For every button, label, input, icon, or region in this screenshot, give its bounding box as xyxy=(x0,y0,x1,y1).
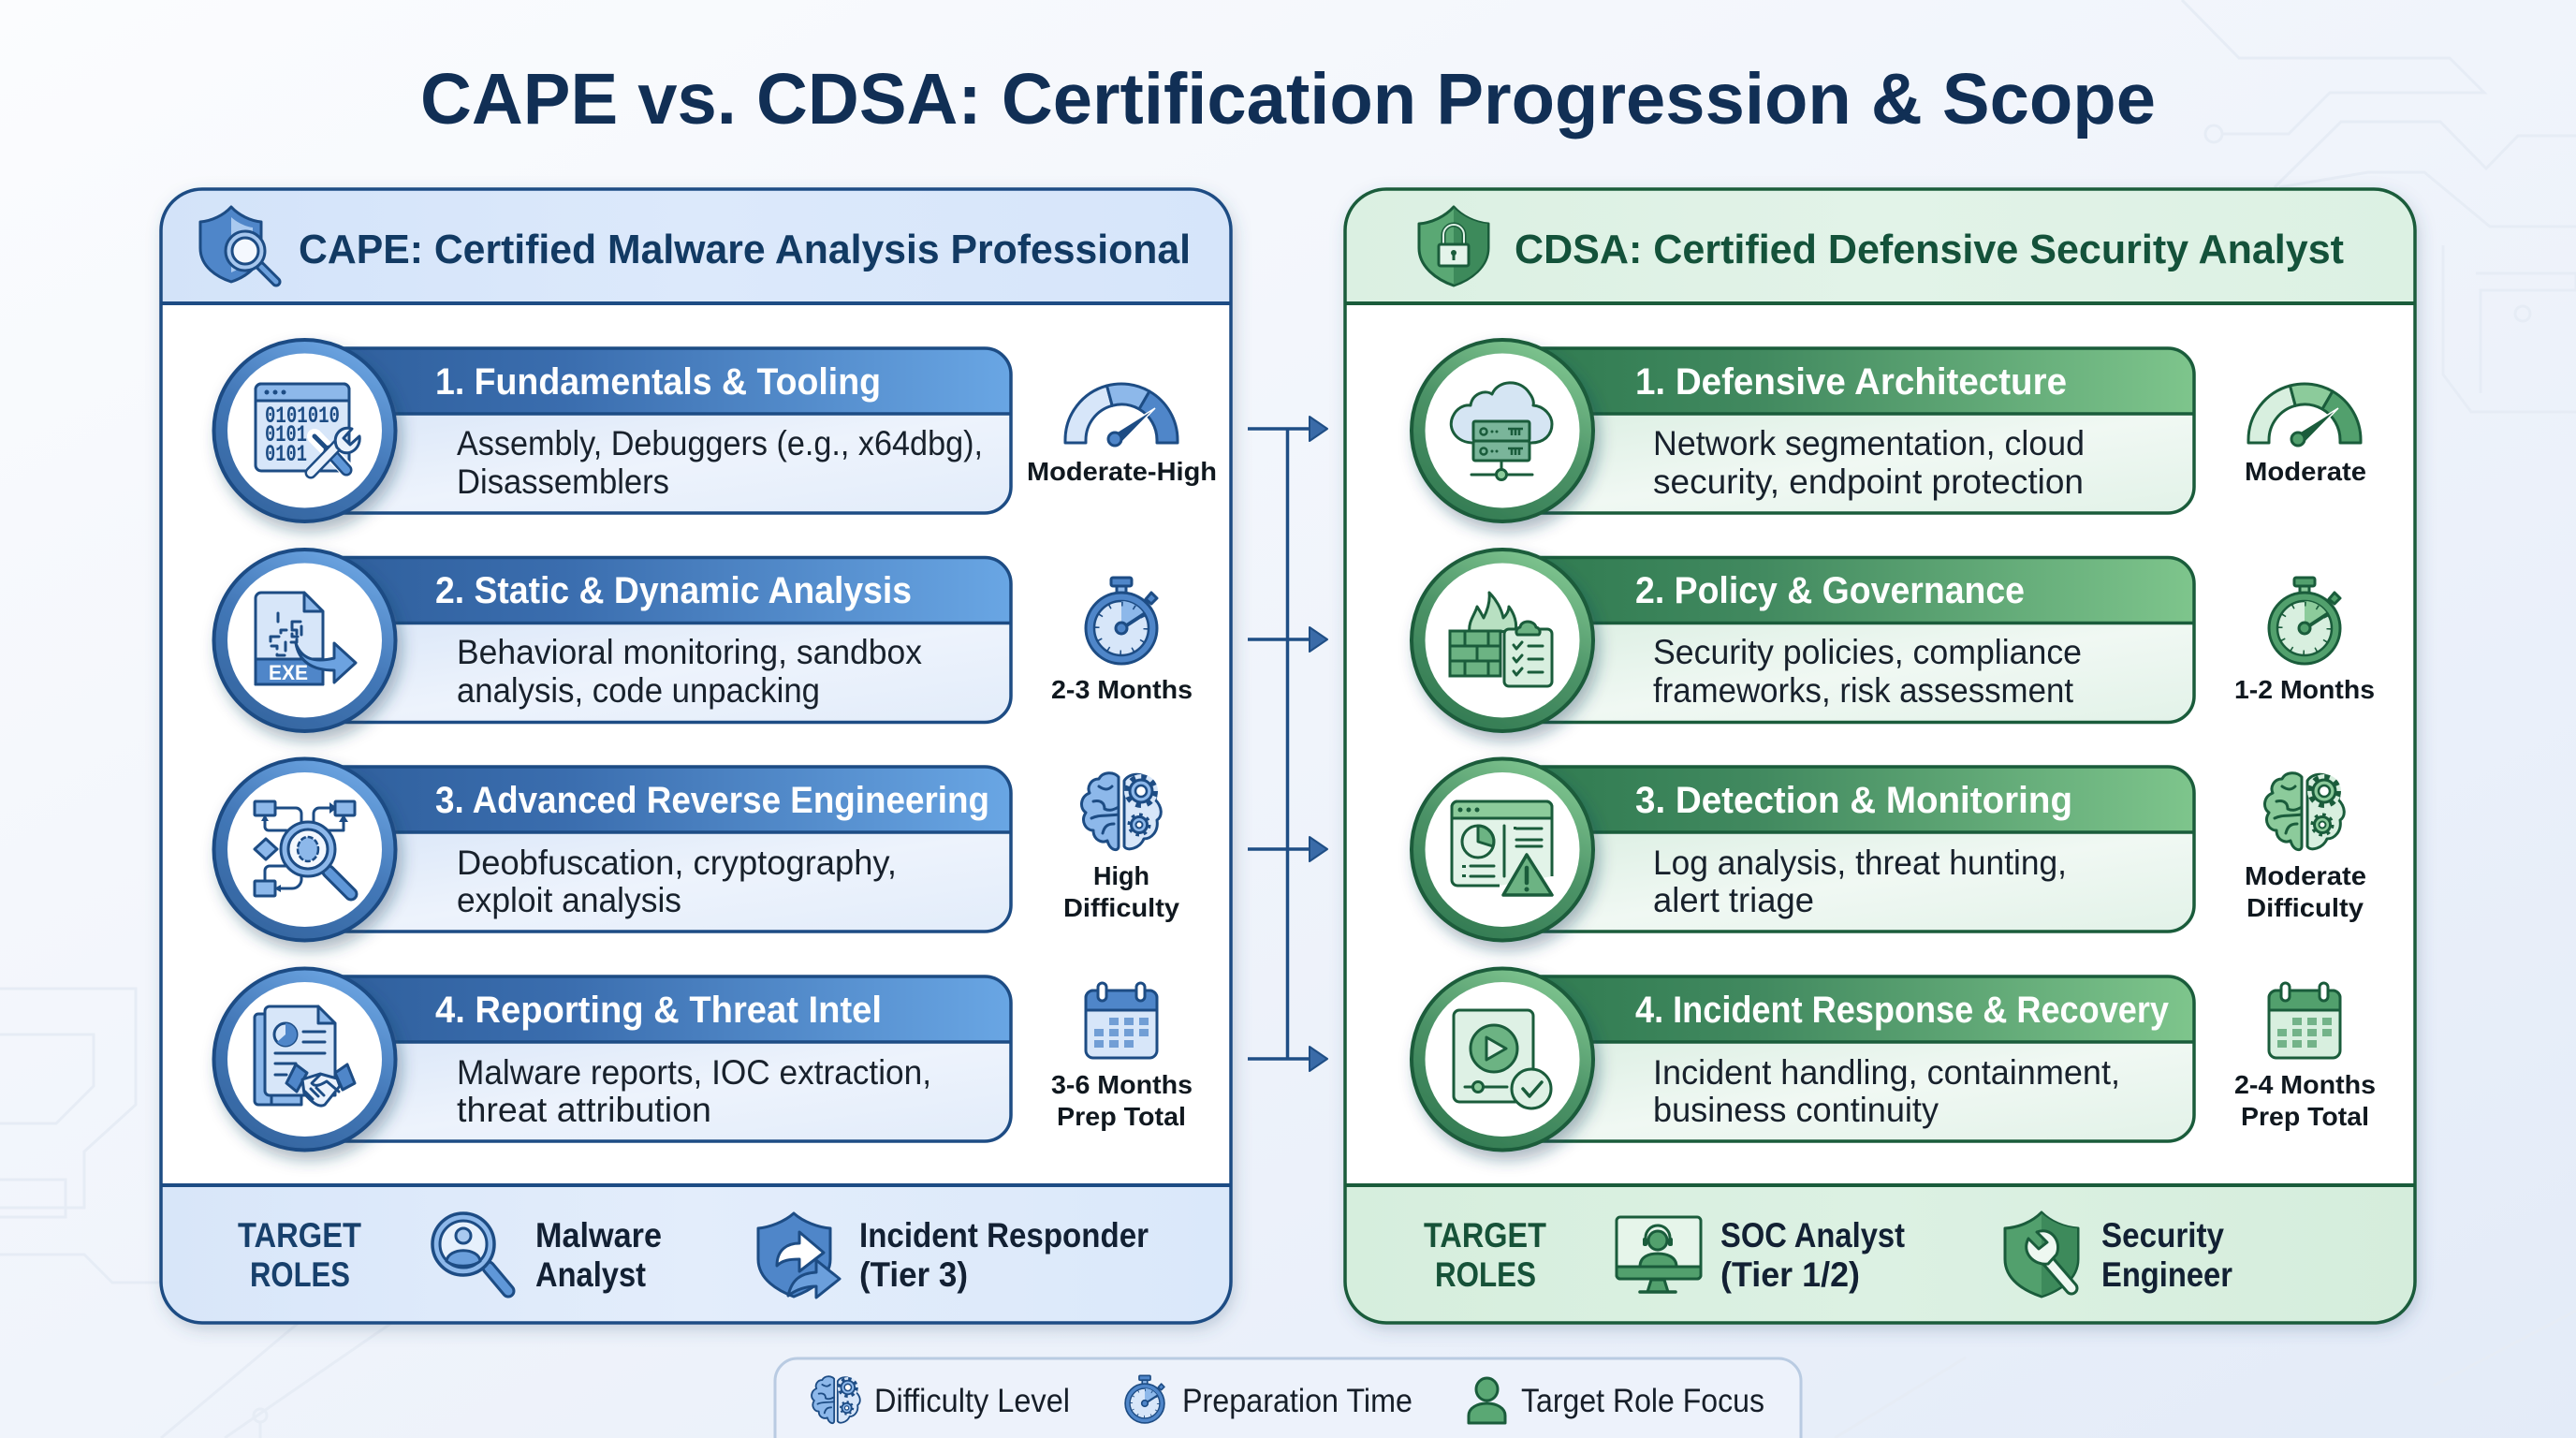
target roles label xyxy=(1424,1216,1546,1294)
difficulty gauge: Moderate-High xyxy=(1027,384,1217,486)
step description: Security policies, compliance xyxy=(1653,633,2082,671)
panel header: CDSA xyxy=(1345,189,2415,303)
role: Incident Responder: Incident Responder xyxy=(859,1216,1149,1255)
step 3: Advanced Reverse Engineering xyxy=(213,758,1011,940)
difficulty: High xyxy=(1063,773,1179,922)
preparation total: 2-4 Months: Prep Total xyxy=(2241,1102,2369,1131)
preparation total: 3-6 Months xyxy=(1051,983,1193,1131)
step description xyxy=(1653,424,2085,501)
legend xyxy=(775,1358,1801,1438)
step description: Incident handling, containment, xyxy=(1653,1053,2120,1092)
step description xyxy=(457,844,897,919)
step 1: Fundamentals & Tooling xyxy=(213,340,1011,521)
step description xyxy=(1653,1053,2120,1129)
step description: security, endpoint protection xyxy=(1653,462,2084,501)
step description xyxy=(457,424,983,501)
step description: frameworks, risk assessment xyxy=(1653,671,2074,710)
legend item: difficulty level: Difficulty Level xyxy=(874,1383,1070,1419)
step heading: 1. Defensive Architecture xyxy=(1635,361,2067,403)
target roles label: ROLES xyxy=(1435,1255,1536,1294)
role: SOC Analyst xyxy=(1720,1216,1905,1294)
icon: firewall and clipboard xyxy=(1450,593,1552,686)
step description: analysis, code unpacking xyxy=(457,671,820,710)
step description xyxy=(457,633,922,710)
panel outline and dividers xyxy=(1345,303,2415,1185)
step description: Disassemblers xyxy=(457,462,669,501)
preparation total: 3-6 Months: Prep Total xyxy=(1057,1102,1186,1131)
step description xyxy=(1653,844,2067,919)
role: Security Engineer xyxy=(2101,1216,2232,1294)
difficulty gauge: Moderate: Moderate xyxy=(2245,457,2366,486)
step description: Behavioral monitoring, sandbox xyxy=(457,633,922,671)
difficulty: Moderate: Moderate xyxy=(2245,861,2366,890)
role: Incident Responder: (Tier 3) xyxy=(859,1255,968,1294)
legend item: preparation time: Preparation Time xyxy=(1182,1383,1412,1419)
role: Security Engineer: Engineer xyxy=(2101,1255,2232,1294)
arrows: CAPE to CDSA xyxy=(1248,417,1327,1071)
icon: playbook with check xyxy=(1454,1010,1551,1108)
difficulty: High: High xyxy=(1093,861,1149,890)
step heading: 4. Reporting & Threat Intel xyxy=(435,990,882,1031)
icon: binary window with tools xyxy=(256,384,359,473)
legend item: difficulty level xyxy=(812,1376,1070,1423)
preparation total: 2-4 Months: 2-4 Months xyxy=(2234,1070,2376,1099)
panel: CAPE xyxy=(161,189,1231,1323)
preparation time: 1-2 Months xyxy=(2234,578,2375,704)
legend item: target role focus: Target Role Focus xyxy=(1521,1383,1764,1419)
icon: shield with magnifier xyxy=(200,207,276,282)
icon: EXE file with arrow: EXE xyxy=(269,661,308,684)
step 1: Defensive Architecture xyxy=(1412,340,2194,521)
difficulty: Moderate: Difficulty xyxy=(2247,893,2364,922)
step description: business continuity xyxy=(1653,1091,1939,1129)
icon: binary window with tools: 0101 xyxy=(265,441,307,468)
title: CAPE vs. CDSA: Certification Progression & Scope xyxy=(420,59,2156,139)
step 4: Incident Response & Recovery xyxy=(1412,968,2194,1150)
icon: EXE file with arrow xyxy=(256,593,356,684)
role: Malware Analyst xyxy=(535,1216,662,1294)
icon: binary window with tools: 0101 xyxy=(265,421,307,448)
step heading: 3. Advanced Reverse Engineering xyxy=(435,780,989,821)
preparation time: 2-3 Months xyxy=(1051,578,1193,704)
step description: Deobfuscation, cryptography, xyxy=(457,844,897,882)
icon: shield with lock xyxy=(1419,207,1488,286)
step description: threat attribution xyxy=(457,1091,711,1129)
panel footer: CDSA target roles xyxy=(1345,1185,2415,1323)
difficulty: High: Difficulty xyxy=(1063,893,1179,922)
step 3: Detection & Monitoring xyxy=(1412,758,2194,940)
icon: dashboard with alert xyxy=(1452,801,1552,895)
step heading: 2. Policy & Governance xyxy=(1635,570,2025,611)
step heading: 1. Fundamentals & Tooling xyxy=(435,361,881,403)
preparation time: 1-2 Months: 1-2 Months xyxy=(2234,675,2375,704)
icon: shield with arrows xyxy=(758,1213,840,1298)
icon: code flow with magnifier xyxy=(255,801,355,896)
legend item: target role focus xyxy=(1469,1378,1764,1423)
difficulty gauge: Moderate-High: Moderate-High xyxy=(1027,457,1217,486)
role: Malware Analyst: Analyst xyxy=(535,1255,646,1294)
panel: CDSA xyxy=(1345,189,2415,1323)
step heading: 4. Incident Response & Recovery xyxy=(1635,990,2170,1031)
step description: exploit analysis xyxy=(457,881,681,919)
step 2: Policy & Governance xyxy=(1412,550,2194,731)
step description: alert triage xyxy=(1653,881,1814,919)
target roles label: TARGET xyxy=(1424,1216,1546,1255)
role: Malware Analyst: Malware xyxy=(535,1216,662,1255)
role: SOC Analyst: SOC Analyst xyxy=(1720,1216,1905,1255)
step heading: 2. Static & Dynamic Analysis xyxy=(435,570,912,611)
target roles label: TARGET xyxy=(238,1216,361,1255)
step description xyxy=(457,1053,931,1129)
legend item: preparation time xyxy=(1125,1375,1412,1423)
step description: Malware reports, IOC extraction, xyxy=(457,1053,931,1092)
icon: cloud server xyxy=(1451,383,1552,479)
panel heading: CDSA: CDSA: Certified Defensive Security Analyst xyxy=(1515,227,2344,272)
panel outline and dividers xyxy=(161,303,1231,1185)
role: SOC Analyst: (Tier 1/2) xyxy=(1720,1255,1860,1294)
step description xyxy=(1653,633,2082,710)
preparation time: 2-3 Months: 2-3 Months xyxy=(1051,675,1193,704)
step description: Assembly, Debuggers (e.g., x64dbg), xyxy=(457,424,983,462)
difficulty gauge: Moderate xyxy=(2245,384,2366,486)
preparation total: 2-4 Months xyxy=(2234,983,2376,1131)
preparation total: 3-6 Months: 3-6 Months xyxy=(1051,1070,1193,1099)
step 4: Reporting & Threat Intel xyxy=(213,968,1011,1150)
icon: SOC analyst monitor xyxy=(1617,1217,1701,1292)
panel header: CAPE xyxy=(161,189,1231,303)
target roles label: ROLES xyxy=(250,1255,350,1294)
icon: report with handshake xyxy=(255,1006,355,1106)
step description: Log analysis, threat hunting, xyxy=(1653,844,2067,882)
step description: Network segmentation, cloud xyxy=(1653,424,2085,462)
icon: magnifier with person xyxy=(432,1213,508,1291)
target roles label xyxy=(238,1216,361,1294)
icon: binary window with tools: 0101010 xyxy=(265,403,340,430)
role: Incident Responder xyxy=(859,1216,1149,1294)
step 2: Static & Dynamic Analysis xyxy=(213,550,1011,731)
panel heading: CAPE: CAPE: Certified Malware Analysis Professional xyxy=(299,227,1191,272)
role: Security Engineer: Security xyxy=(2101,1216,2224,1255)
difficulty: Moderate xyxy=(2245,773,2366,922)
step heading: 3. Detection & Monitoring xyxy=(1635,780,2072,821)
panel footer: CAPE target roles xyxy=(161,1185,1231,1323)
icon: shield with wrench xyxy=(2005,1212,2078,1297)
